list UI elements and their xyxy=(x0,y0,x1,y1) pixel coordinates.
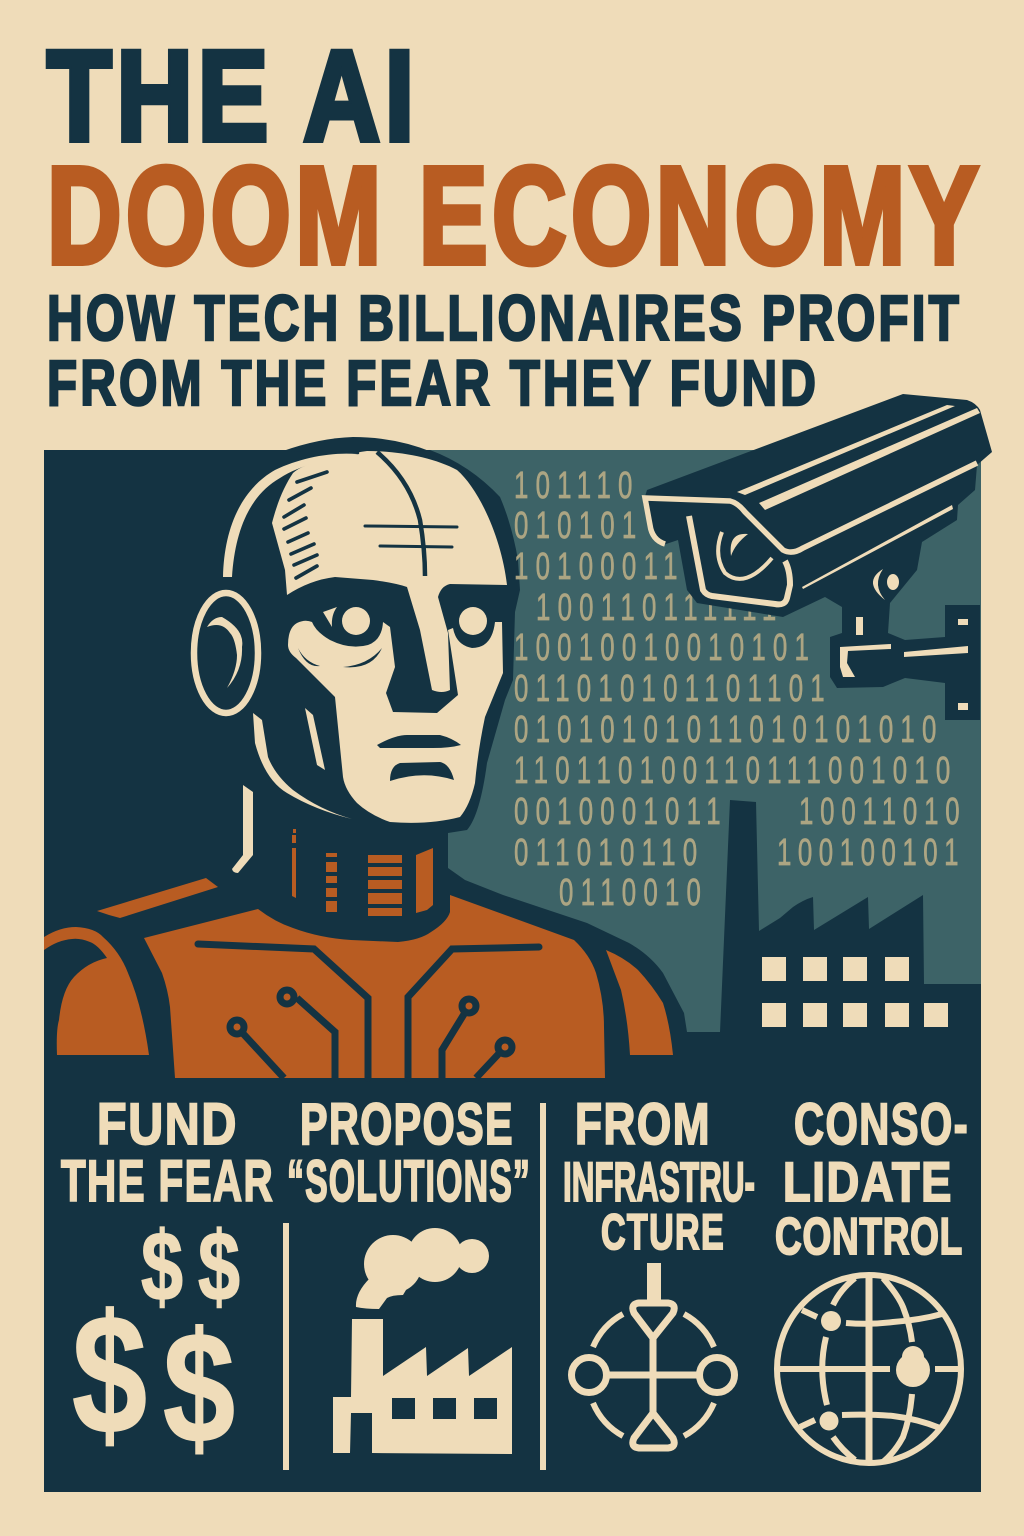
heading: propose solutions xyxy=(287,1092,531,1214)
icon: network node xyxy=(572,1263,734,1448)
binary digits xyxy=(514,464,966,913)
heading: consolidate control xyxy=(775,1092,969,1266)
binary digits: 10010010010101 xyxy=(514,626,816,668)
cheek creases xyxy=(298,648,382,667)
icon: dollar signs: $ xyxy=(72,1280,147,1470)
icon: globe xyxy=(777,1275,961,1463)
robot xyxy=(44,437,673,1078)
subtitle xyxy=(47,282,962,419)
teal background with factory silhouette xyxy=(430,450,981,1032)
column: fund the fear xyxy=(61,1092,274,1476)
neck orange bands xyxy=(292,829,433,916)
forehead marks xyxy=(284,452,457,578)
mount details xyxy=(840,569,968,710)
hood stripes xyxy=(737,405,980,589)
icon: dollar signs xyxy=(72,1211,240,1476)
column: from infrastructure xyxy=(563,1092,755,1448)
chest xyxy=(144,895,605,1078)
circuit nodes xyxy=(230,990,512,1054)
skull and nose xyxy=(272,451,507,692)
factory windows xyxy=(762,957,948,1027)
icon: dollar signs: $ xyxy=(141,1211,183,1321)
title line: THE AI: THE AI xyxy=(47,25,419,168)
camera body and mount silhouette xyxy=(643,394,992,720)
icon: factory with smoke xyxy=(333,1228,512,1454)
binary digits: 0010001011 xyxy=(514,790,728,832)
heading: from infrastructure: INFRASTRU- xyxy=(563,1150,755,1213)
surveillance camera xyxy=(643,394,992,720)
shoulder strip xyxy=(97,878,218,918)
hair arc xyxy=(223,454,357,577)
binary digits: 110110100110111001010 xyxy=(514,749,957,791)
heading: propose solutions: “SOLUTIONS” xyxy=(287,1149,531,1214)
column: consolidate control xyxy=(775,1092,969,1463)
left arm xyxy=(44,927,149,1055)
icon: dollar signs: $ xyxy=(163,1300,235,1476)
heading: from infrastructure: CTURE xyxy=(601,1204,725,1260)
binary digits: 100110111111 xyxy=(536,586,783,628)
face xyxy=(288,621,503,823)
binary digits: 011010101101101 xyxy=(514,667,832,709)
ear xyxy=(194,593,258,713)
lens xyxy=(718,532,772,579)
right arm xyxy=(606,950,673,1055)
mouth xyxy=(377,735,461,781)
heading: fund the fear: THE FEAR xyxy=(61,1149,274,1214)
heading: fund the fear: FUND xyxy=(97,1092,238,1157)
camera hood edge xyxy=(645,463,977,552)
eyes xyxy=(323,607,487,635)
divider xyxy=(283,1223,289,1470)
jaw lines xyxy=(232,708,352,873)
heading: consolidate control: LIDATE xyxy=(783,1150,953,1213)
binary digits: 011010110 xyxy=(514,831,704,873)
head outline above panel xyxy=(283,437,432,452)
binary digits: 01010101011010101010 xyxy=(514,708,944,750)
title xyxy=(47,25,983,293)
lens frame xyxy=(689,516,790,604)
binary digits: 010101 xyxy=(514,504,643,546)
icon: dollar signs: $ xyxy=(198,1211,240,1321)
column: propose solutions xyxy=(287,1092,531,1454)
binary digits: 0110010 xyxy=(559,871,708,913)
binary digits: 10100011 xyxy=(514,545,685,587)
main illustration panel xyxy=(44,394,992,1492)
binary digits: 10011010 xyxy=(799,790,966,832)
subtitle line 2: FROM THE FEAR THEY FUND xyxy=(47,347,819,419)
heading: fund the fear xyxy=(61,1092,274,1214)
binary digits: 101110 xyxy=(514,464,640,506)
divider xyxy=(540,1103,546,1470)
heading: from infrastructure: FROM xyxy=(575,1092,711,1157)
heading: propose solutions: PROPOSE xyxy=(300,1092,514,1157)
heading: from infrastructure xyxy=(563,1092,755,1260)
binary digits: 100100101 xyxy=(777,831,965,873)
circuit traces xyxy=(198,944,539,1078)
